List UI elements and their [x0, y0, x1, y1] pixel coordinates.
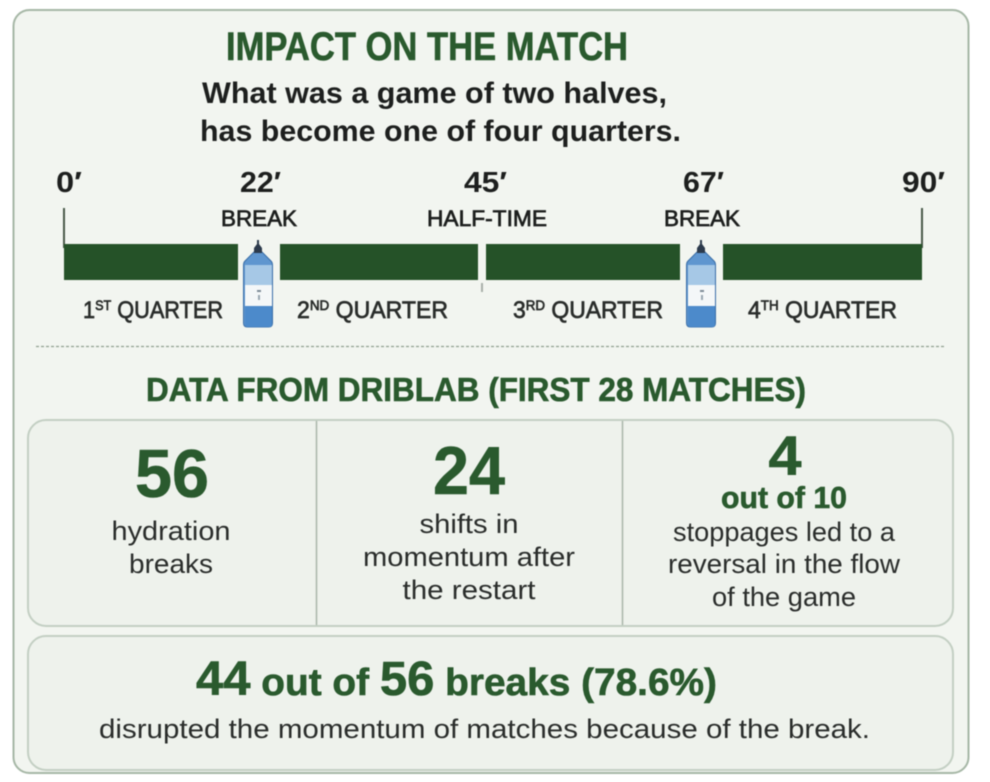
stoppage labels: HALF-TIME — [427, 206, 547, 231]
quarter labels: QUARTER — [545, 297, 663, 324]
end ticks — [63, 208, 923, 292]
stat: 24 shifts in momentum: the restart — [402, 575, 536, 605]
minute labels: 67′ — [683, 167, 724, 199]
quarter labels: RD — [526, 297, 545, 313]
title: IMPACT ON THE MATCH — [226, 25, 628, 69]
stat: 56 hydration breaks — [112, 436, 230, 579]
stat: 56 hydration breaks: breaks — [129, 549, 213, 579]
stat: 4 out of 10 stoppages: 4 — [768, 424, 802, 487]
subtitle — [200, 77, 681, 148]
callout text: disrupted the momentum of matches because of the break. — [99, 714, 870, 744]
stoppage labels — [221, 206, 740, 231]
stat: 4 out of 10 stoppages: out of 10 — [721, 480, 847, 515]
panel: three statistics — [28, 420, 953, 626]
subtitle: has become one of four quarters. — [200, 115, 681, 148]
stat: 56 hydration breaks: hydration — [112, 516, 230, 546]
minute labels: 0′ — [56, 167, 82, 199]
stat: 4 out of 10 stoppages: of the game — [712, 582, 856, 612]
callout headline: 44 out of 56 breaks (78.6%) — [196, 653, 717, 706]
heading: data source: DATA FROM DRIBLAB (FIRST 28 MATCHES) — [146, 371, 806, 408]
quarter labels: QUARTER — [329, 297, 448, 324]
stat: 4 out of 10 stoppages — [668, 424, 901, 612]
minute labels: 22′ — [240, 167, 281, 199]
stat: 24 shifts in momentum — [363, 433, 575, 605]
quarter labels: 4 — [748, 297, 761, 324]
stat: 24 shifts in momentum: momentum after — [363, 542, 575, 572]
timeline — [56, 167, 945, 327]
stat: 24 shifts in momentum: shifts in — [420, 509, 518, 539]
minute labels: 90′ — [902, 167, 945, 199]
quarter labels: ST — [95, 297, 112, 313]
minute labels — [56, 167, 945, 199]
icon: water bottle 2 — [686, 240, 716, 327]
quarter labels: 2 — [297, 297, 310, 324]
quarter labels: 1 — [83, 297, 96, 324]
quarter labels: 3 — [513, 297, 526, 324]
quarter labels: ND — [310, 297, 329, 313]
quarter bars — [64, 244, 922, 280]
minute labels: 45′ — [464, 167, 507, 199]
panel: summary callout — [28, 636, 953, 770]
stat: 56 hydration breaks: 56 — [135, 436, 209, 512]
stoppage labels: BREAK — [221, 206, 297, 231]
stoppage labels: BREAK — [664, 206, 740, 231]
quarter labels: TH — [761, 297, 779, 313]
quarter labels: QUARTER — [111, 297, 223, 324]
stat: 4 out of 10 stoppages: reversal in the flow — [668, 549, 901, 579]
quarter labels: QUARTER — [779, 297, 897, 324]
subtitle: What was a game of two halves, — [202, 77, 667, 110]
quarter labels — [83, 297, 897, 324]
stat: 4 out of 10 stoppages: stoppages led to a — [673, 517, 895, 547]
icon: water bottle 1 — [244, 240, 272, 327]
stat: 24 shifts in momentum: 24 — [433, 433, 505, 509]
